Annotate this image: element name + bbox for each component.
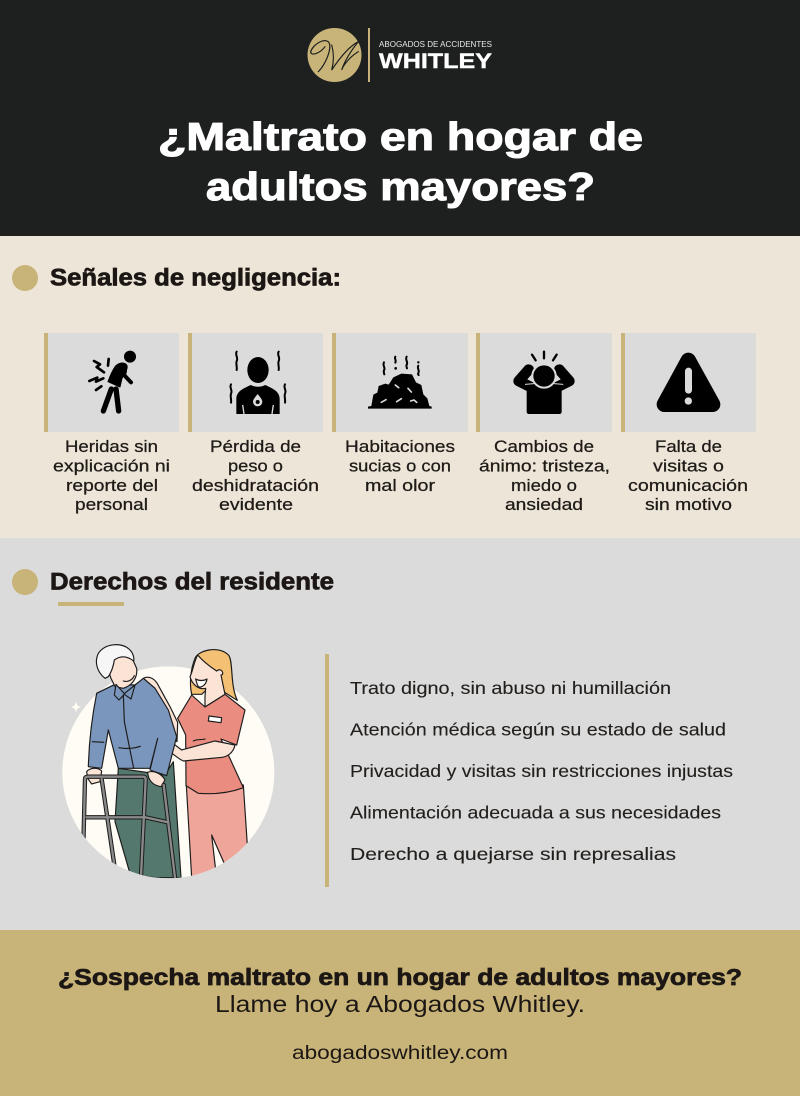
icon: stressed person <box>519 352 569 414</box>
rights list: Privacidad y visitas sin restricciones injustas <box>350 761 733 781</box>
label: pérdida: evidente <box>219 496 293 514</box>
footer call to action <box>0 930 800 1096</box>
icon: injured person <box>89 351 136 411</box>
footer call to action: ¿Sospecha maltrato en un hogar de adultos mayores? <box>58 964 742 990</box>
label: falta: Falta de <box>655 438 722 456</box>
card: falta de visitas <box>621 333 756 514</box>
label: habitaciones <box>345 438 455 495</box>
label: habitaciones: Habitaciones <box>345 438 455 456</box>
label: pérdida: peso o <box>228 458 283 476</box>
label: cambios: ánimo: tristeza, <box>479 458 610 476</box>
label: cambios: ansiedad <box>505 496 583 514</box>
footer call to action: abogadoswhitley.com <box>292 1043 508 1064</box>
label: heridas <box>53 438 170 514</box>
panel: derechos del residente <box>12 569 732 887</box>
man <box>83 645 181 878</box>
label: heridas: Heridas sin <box>65 438 158 456</box>
rights list: Alimentación adecuada a sus necesidades <box>350 802 721 822</box>
label: pérdida <box>192 438 319 514</box>
label: falta: comunicación <box>628 477 748 495</box>
label: cambios: Cambios de <box>494 438 594 456</box>
rights list: Derecho a quejarse sin represalias <box>350 844 676 864</box>
card: habitaciones <box>332 333 468 495</box>
label: falta <box>628 438 748 514</box>
label: pérdida: deshidratación <box>192 477 319 495</box>
header panel <box>0 0 800 236</box>
logo: WHITLEY <box>379 49 492 73</box>
nurse <box>143 650 248 878</box>
label: habitaciones: sucias o con <box>349 458 451 476</box>
label: heridas: reporte del <box>66 477 158 495</box>
backdrop circle <box>62 666 274 878</box>
rights list: Trato digno, sin abuso ni humillación <box>350 678 671 698</box>
title <box>158 116 643 209</box>
label: falta: visitas o <box>653 458 724 476</box>
label: cambios: miedo o <box>511 477 577 495</box>
title: adultos mayores? <box>206 166 595 209</box>
label: cambios <box>479 438 610 514</box>
footer call to action: Llame hoy a Abogados Whitley. <box>215 991 585 1017</box>
icon: warning triangle <box>664 360 713 405</box>
heading: señales: Señales de negligencia: <box>50 264 341 292</box>
card: heridas <box>44 333 179 514</box>
logo <box>308 28 492 82</box>
rights list: Atención médica según su estado de salud <box>350 720 726 740</box>
card: pérdida de peso <box>188 333 323 514</box>
heading: derechos: Derechos del residente <box>50 568 334 596</box>
title: ¿Maltrato en hogar de <box>158 116 643 159</box>
label: habitaciones: mal olor <box>365 477 436 495</box>
walker <box>83 777 175 878</box>
illustration: nurse helping elderly man with walker <box>62 645 274 878</box>
icon: dirty pile <box>368 357 432 409</box>
label: heridas: explicación ni <box>53 458 170 476</box>
label: heridas: personal <box>75 496 148 514</box>
label: pérdida: Pérdida de <box>210 438 301 456</box>
rights list <box>350 678 733 864</box>
logo: ABOGADOS DE ACCIDENTES <box>379 39 492 49</box>
icon: sweating torso <box>230 352 286 414</box>
card: cambios de ánimo <box>476 333 612 514</box>
panel: señales de negligencia <box>0 236 800 538</box>
label: falta: sin motivo <box>645 496 732 514</box>
heading: derechos <box>12 568 334 606</box>
